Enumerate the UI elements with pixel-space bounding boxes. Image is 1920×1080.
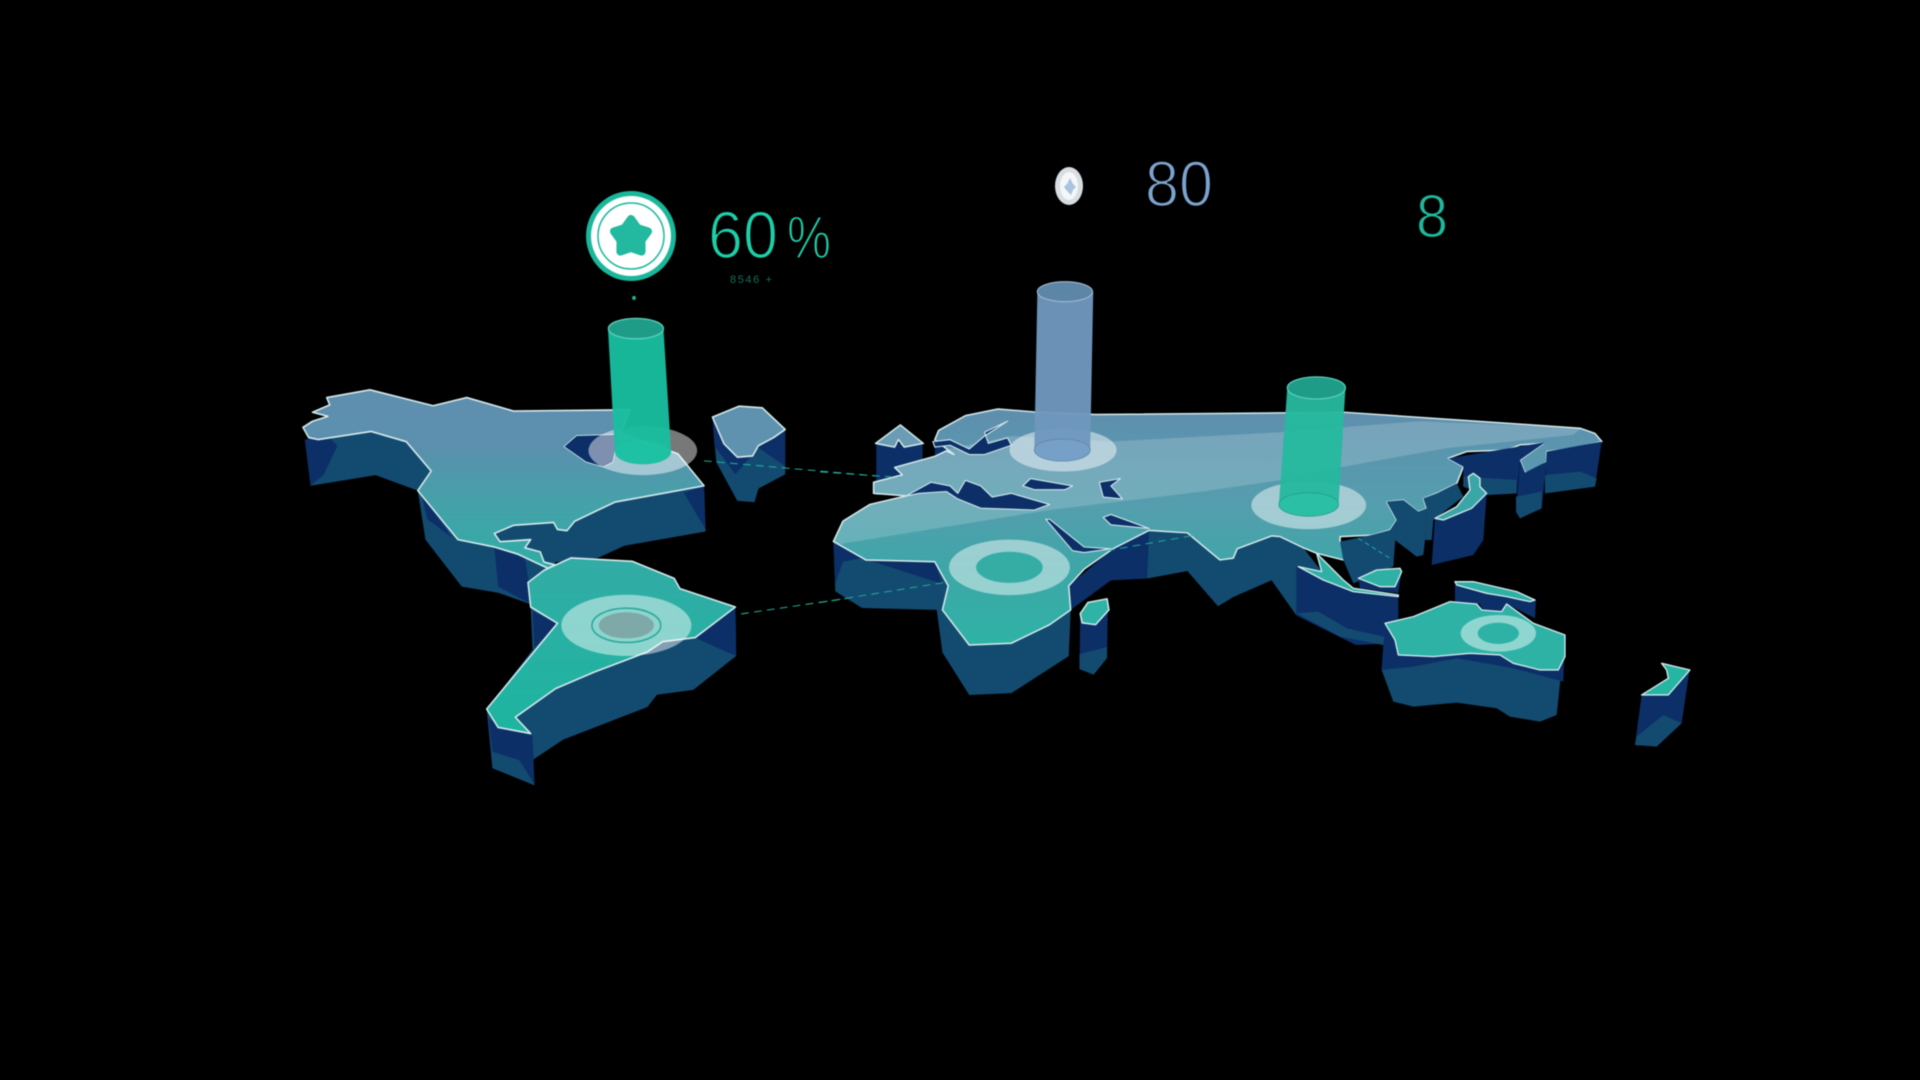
Greenland extrusion [712, 417, 785, 502]
metric: 60 percent [708, 198, 831, 273]
world map infographic canvas [302, 161, 1692, 786]
Iceland extrusion [876, 443, 923, 495]
New Zealand [1635, 663, 1690, 747]
Japan top surface [1435, 473, 1487, 520]
cylinder: North America [608, 318, 671, 464]
connector: Africa to Asia [1107, 535, 1195, 551]
map: East Asia islands and Oceania [1297, 442, 1690, 747]
connector: South America to Africa [741, 594, 880, 614]
light band over Eurasia [833, 421, 1582, 545]
Madagascar extrusion [1079, 610, 1108, 675]
Australia [1382, 602, 1565, 722]
ring: North America [588, 426, 697, 475]
ring: Europe [1009, 429, 1117, 472]
Eurasia and Africa top surface [833, 409, 1602, 645]
North America extrusion [305, 431, 706, 605]
cylinder: Asia [1279, 377, 1345, 516]
badge: small rotating medal [1055, 167, 1083, 205]
Mediterranean Sea [906, 480, 1050, 510]
caption under 60 percent: 8546 + [730, 274, 774, 286]
connector: Africa line [820, 582, 946, 602]
Red Sea [1046, 519, 1111, 553]
badge: star medal [586, 191, 676, 281]
Persian Gulf [1103, 514, 1149, 528]
South America extrusion [487, 607, 736, 785]
East Asia extrusions [1297, 442, 1602, 645]
metric: 8: 8 [1416, 183, 1448, 250]
Hudson Bay [564, 434, 619, 467]
metric: 60 percent: % [787, 204, 831, 271]
ring: South America [561, 595, 691, 656]
connector: Southeast Asia [1358, 538, 1390, 558]
Baltic Sea [933, 421, 1011, 454]
New Guinea [1455, 582, 1536, 618]
Madagascar top surface [1080, 599, 1109, 625]
Indonesia strip top surface [1298, 553, 1398, 597]
connector: Atlantic to Europe [820, 472, 900, 477]
ring: Africa [949, 540, 1070, 595]
metric: 80: 80 [1145, 148, 1213, 220]
metric: 60 percent: 60 [708, 198, 778, 273]
Caspian Sea [1099, 479, 1122, 499]
North America top surface [303, 390, 704, 568]
Borneo [1358, 568, 1402, 593]
South America top surface [487, 558, 735, 734]
map: Europe, Africa and Asia [820, 282, 1602, 695]
dot under badge [632, 296, 636, 300]
Scandinavia extrusion [935, 429, 1011, 458]
Black Sea [1023, 479, 1073, 490]
map: Americas and Greenland [303, 296, 880, 785]
Greenland top surface [712, 406, 785, 457]
ring: Asia [1251, 481, 1366, 529]
cylinder: Europe [1034, 282, 1093, 461]
Eurasia and Africa extrusions [833, 530, 1398, 695]
Iceland top surface [875, 425, 923, 447]
connector: North America to Europe [704, 461, 880, 476]
